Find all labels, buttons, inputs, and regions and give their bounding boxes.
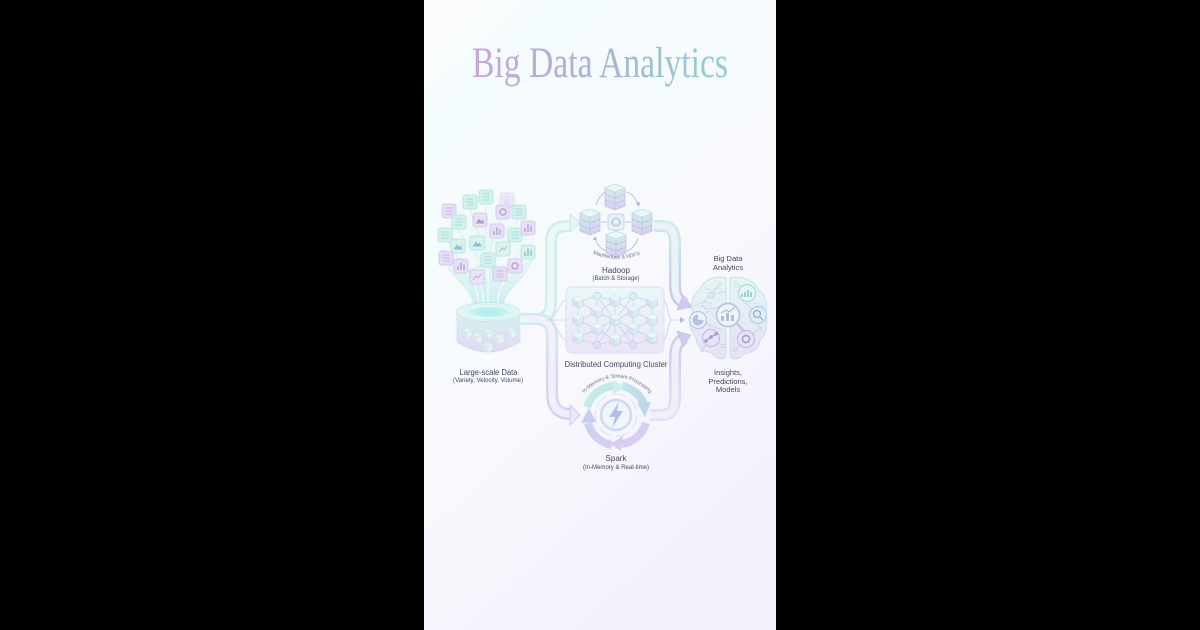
- label: Big Data Analytics: Big Data: [714, 254, 743, 263]
- cluster box: [566, 287, 664, 353]
- label: insights, predictions, models: [708, 368, 748, 394]
- icon: pie badge: [690, 312, 706, 328]
- label: Big Data Analytics: [713, 254, 743, 272]
- label: insights, predictions, models: Predictions,: [708, 377, 748, 386]
- label: Hadoop: (Batch & Storage): [592, 276, 640, 282]
- label: Big Data Analytics: Analytics: [713, 263, 743, 272]
- icon: Spark ring and lightning bolt: [581, 380, 651, 451]
- arrow: Spark to output: [650, 331, 691, 415]
- panel: large-scale data source: [434, 188, 542, 384]
- arc label: MapReduce and HDFS: MapReduce & HDFS: [593, 250, 640, 259]
- label: Hadoop: [592, 266, 640, 282]
- label: insights, predictions, models: Insights,: [714, 368, 742, 377]
- panel: Hadoop: [580, 184, 652, 282]
- arrow: cluster to output: [664, 300, 685, 340]
- icon: magnifier badge: [750, 306, 766, 324]
- panel: Spark: [581, 374, 652, 471]
- icon: network badge: [702, 330, 720, 346]
- label: Spark: [583, 454, 649, 471]
- label: Spark: Spark: [606, 454, 627, 463]
- arc label: in-memory and stream processing: In-Memory & Stream Processing: [582, 374, 652, 394]
- label: Spark: (In-Memory & Real-time): [583, 465, 649, 471]
- icon: chart badge: [738, 284, 756, 302]
- arrow: Hadoop to output: [654, 226, 692, 310]
- label: large-scale data: Large-scale Data: [460, 368, 518, 377]
- label: insights, predictions, models: Models: [716, 385, 740, 394]
- title: Big Data Analytics: [472, 40, 728, 87]
- icon: Hadoop server ring: [580, 184, 652, 257]
- icon: brain with analytics badges: [690, 277, 767, 359]
- label: large-scale data: [453, 368, 523, 384]
- arrow: source to Spark: [528, 319, 580, 425]
- arrow: source to Hadoop: [520, 214, 580, 319]
- panel: distributed computing cluster: [564, 287, 668, 369]
- icon: central magnifier chart: [716, 304, 745, 332]
- node network: [572, 292, 658, 349]
- panel: Big Data Analytics output: [690, 254, 767, 394]
- arrow: source to cluster: [546, 300, 566, 340]
- label: large-scale data: (Variety, Velocity, Volume): [453, 377, 523, 384]
- label: Hadoop: Hadoop: [602, 266, 631, 275]
- data cylinder: [457, 302, 520, 352]
- cloud of data tiles and funnel: [434, 188, 542, 307]
- panel: infographic background: [424, 0, 776, 630]
- label: distributed computing cluster: Distributed Computing Cluster: [564, 359, 668, 369]
- icon: gear badge: [738, 330, 754, 348]
